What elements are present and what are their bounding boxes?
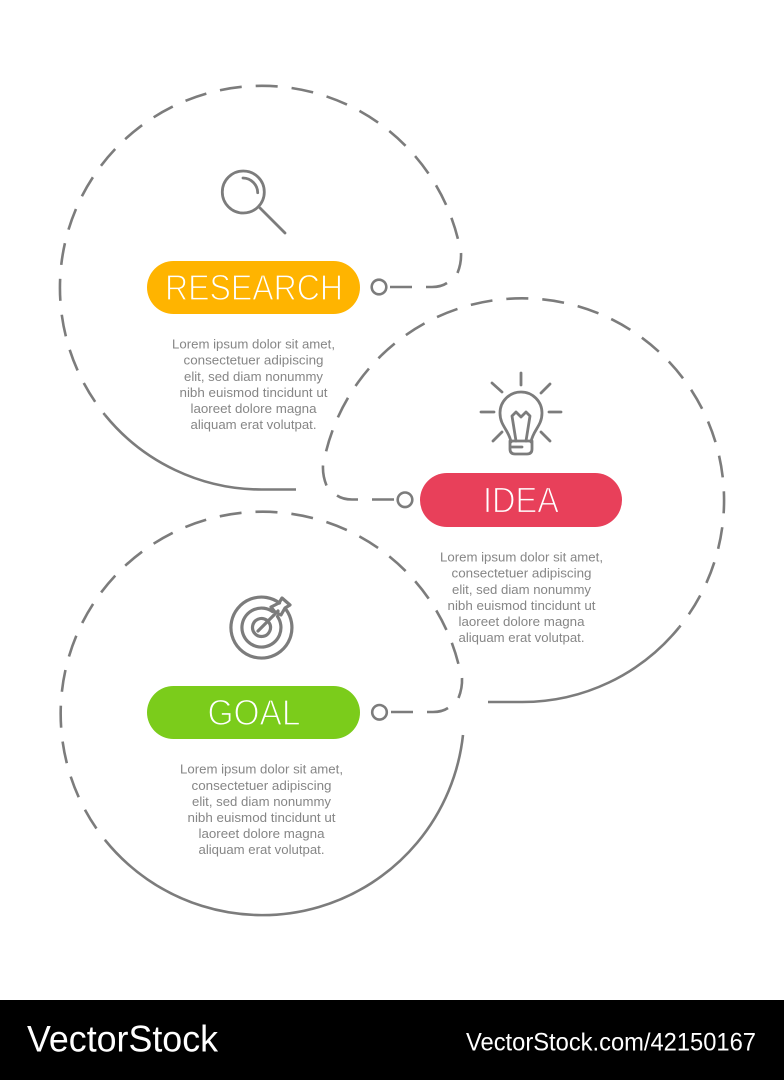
text block: research: nibh euismod tincidunt ut	[180, 386, 328, 400]
text block: idea	[440, 551, 603, 645]
pill: idea	[420, 473, 622, 527]
text block: goal: nibh euismod tincidunt ut	[188, 811, 336, 825]
dashed arc: idea	[326, 298, 724, 628]
footer logo text: VectorStock	[27, 1019, 218, 1060]
solid arc: idea	[488, 628, 679, 702]
panel: goal step	[61, 512, 463, 915]
text block: idea: elit, sed diam nonummy	[452, 583, 592, 597]
heading: goal: GOAL	[208, 692, 300, 733]
solid arc: goal	[105, 735, 463, 915]
text block: research: laoreet dolore magna	[190, 402, 317, 416]
text block: idea: Lorem ipsum dolor sit amet,	[440, 551, 603, 565]
pill: goal	[147, 686, 360, 739]
dashed arc: goal	[61, 512, 458, 840]
icon: light bulb	[481, 373, 561, 454]
dashed arc: research	[60, 86, 458, 415]
text block: idea: aliquam erat volutpat.	[458, 631, 584, 645]
text block: idea: laoreet dolore magna	[458, 615, 585, 629]
text block: goal: elit, sed diam nonummy	[192, 795, 332, 809]
dashed ring: research	[390, 253, 461, 287]
text block: research: aliquam erat volutpat.	[190, 418, 316, 432]
text block: goal: Lorem ipsum dolor sit amet,	[180, 763, 343, 777]
text block: research: elit, sed diam nonummy	[184, 370, 324, 384]
text block: research: Lorem ipsum dolor sit amet,	[172, 338, 335, 352]
text block: research: consectetuer adipiscing	[184, 354, 324, 368]
icon: target with arrow	[231, 597, 292, 658]
dashed ring: goal	[391, 678, 462, 712]
solid arc: research	[105, 415, 296, 490]
panel: idea step	[323, 298, 724, 702]
connector dot: idea	[398, 492, 412, 507]
text block: goal	[180, 763, 343, 857]
footer bar	[0, 1000, 784, 1080]
panel: research step	[60, 86, 461, 490]
text block: idea: nibh euismod tincidunt ut	[448, 599, 596, 613]
dashed ring: idea	[323, 466, 394, 500]
text block: goal: laoreet dolore magna	[198, 827, 325, 841]
pill: research	[147, 261, 360, 314]
text block: research	[172, 338, 335, 432]
heading: idea: IDEA	[483, 479, 559, 520]
text block: idea: consectetuer adipiscing	[452, 567, 592, 581]
icon: magnifying glass	[222, 171, 285, 233]
heading: research: RESEARCH	[165, 267, 343, 308]
text block: goal: consectetuer adipiscing	[192, 779, 332, 793]
connector dot: research	[372, 280, 386, 294]
text block: goal: aliquam erat volutpat.	[198, 843, 324, 857]
connector dot: goal	[372, 705, 387, 720]
footer url text: VectorStock.com/42150167	[466, 1029, 756, 1057]
